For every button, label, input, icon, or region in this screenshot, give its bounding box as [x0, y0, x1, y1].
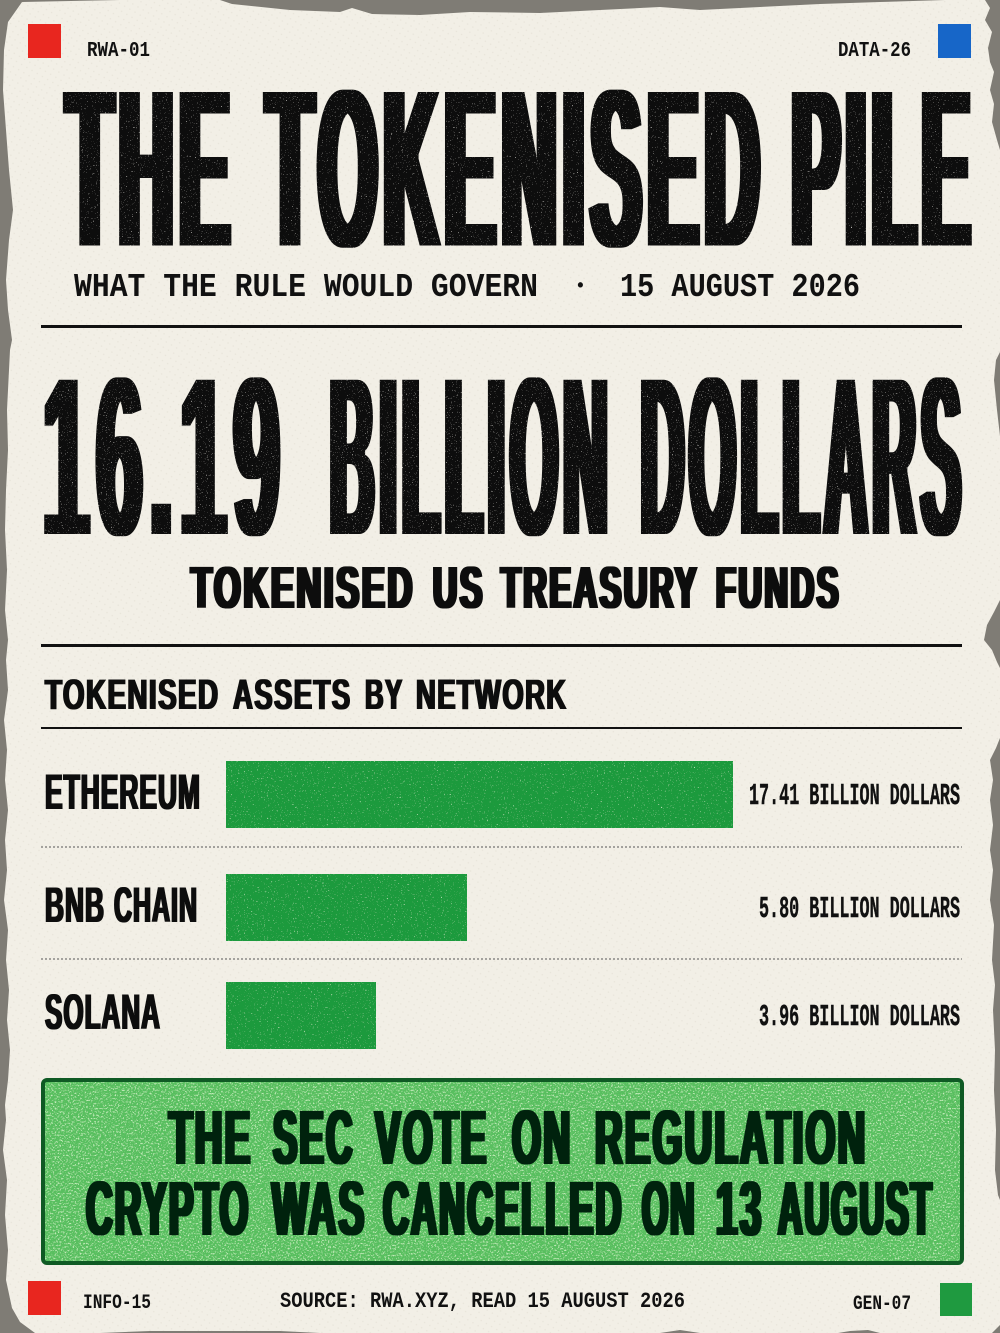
divider	[41, 727, 962, 729]
title: THE	[67, 40, 236, 296]
label: DATA-26: DATA-26	[838, 40, 911, 63]
divider	[41, 644, 962, 647]
callout: ON	[512, 1095, 572, 1181]
row: BNB Chain: CHAIN	[114, 877, 198, 933]
headline figure: 16.19	[43, 328, 287, 585]
headline caption: TREASURY	[501, 555, 699, 621]
headline caption: US	[433, 555, 485, 621]
divider	[41, 325, 962, 328]
row: Solana	[45, 982, 960, 1049]
callout: SEC	[273, 1095, 354, 1181]
headline caption: FUNDS	[716, 555, 841, 621]
subtitle: WHAT THE RULE WOULD GOVERN	[74, 269, 538, 306]
callout: CRYPTO	[86, 1166, 250, 1252]
corner square: red top-left	[28, 24, 61, 58]
row: BNB Chain: BNB	[45, 877, 105, 933]
chart heading: TOKENISED	[45, 671, 220, 719]
callout	[43, 1080, 962, 1263]
chart heading: NETWORK	[416, 671, 568, 719]
row: BNB Chain	[45, 874, 960, 941]
chart heading	[45, 671, 568, 719]
chart heading: BY	[365, 671, 404, 719]
headline caption	[191, 555, 841, 621]
callout: VOTE	[375, 1095, 488, 1181]
callout: THE	[169, 1095, 252, 1181]
subtitle: •	[575, 277, 586, 297]
label: GEN-07: GEN-07	[853, 1293, 911, 1316]
row: Ethereum	[45, 761, 960, 828]
subtitle	[74, 269, 860, 306]
callout: CANCELLED	[383, 1166, 624, 1252]
chart heading: ASSETS	[233, 671, 352, 719]
callout: WAS	[272, 1166, 366, 1252]
callout: ON	[642, 1166, 696, 1252]
label: RWA-01: RWA-01	[87, 40, 150, 63]
bar chart	[41, 761, 962, 1049]
label: INFO-15: INFO-15	[83, 1292, 151, 1315]
source line: SOURCE: RWA.XYZ, READ 15 AUGUST 2026	[280, 1289, 685, 1314]
subtitle: 15 AUGUST 2026	[620, 269, 860, 306]
corner square: green bottom-right	[940, 1283, 972, 1316]
corner square: blue top-right	[938, 24, 971, 58]
corner square: red bottom-left	[28, 1281, 61, 1315]
row: Solana: SOLANA	[45, 984, 161, 1040]
row: Ethereum: ETHEREUM	[45, 764, 201, 820]
headline caption: TOKENISED	[191, 555, 415, 621]
callout: 13	[716, 1166, 764, 1252]
